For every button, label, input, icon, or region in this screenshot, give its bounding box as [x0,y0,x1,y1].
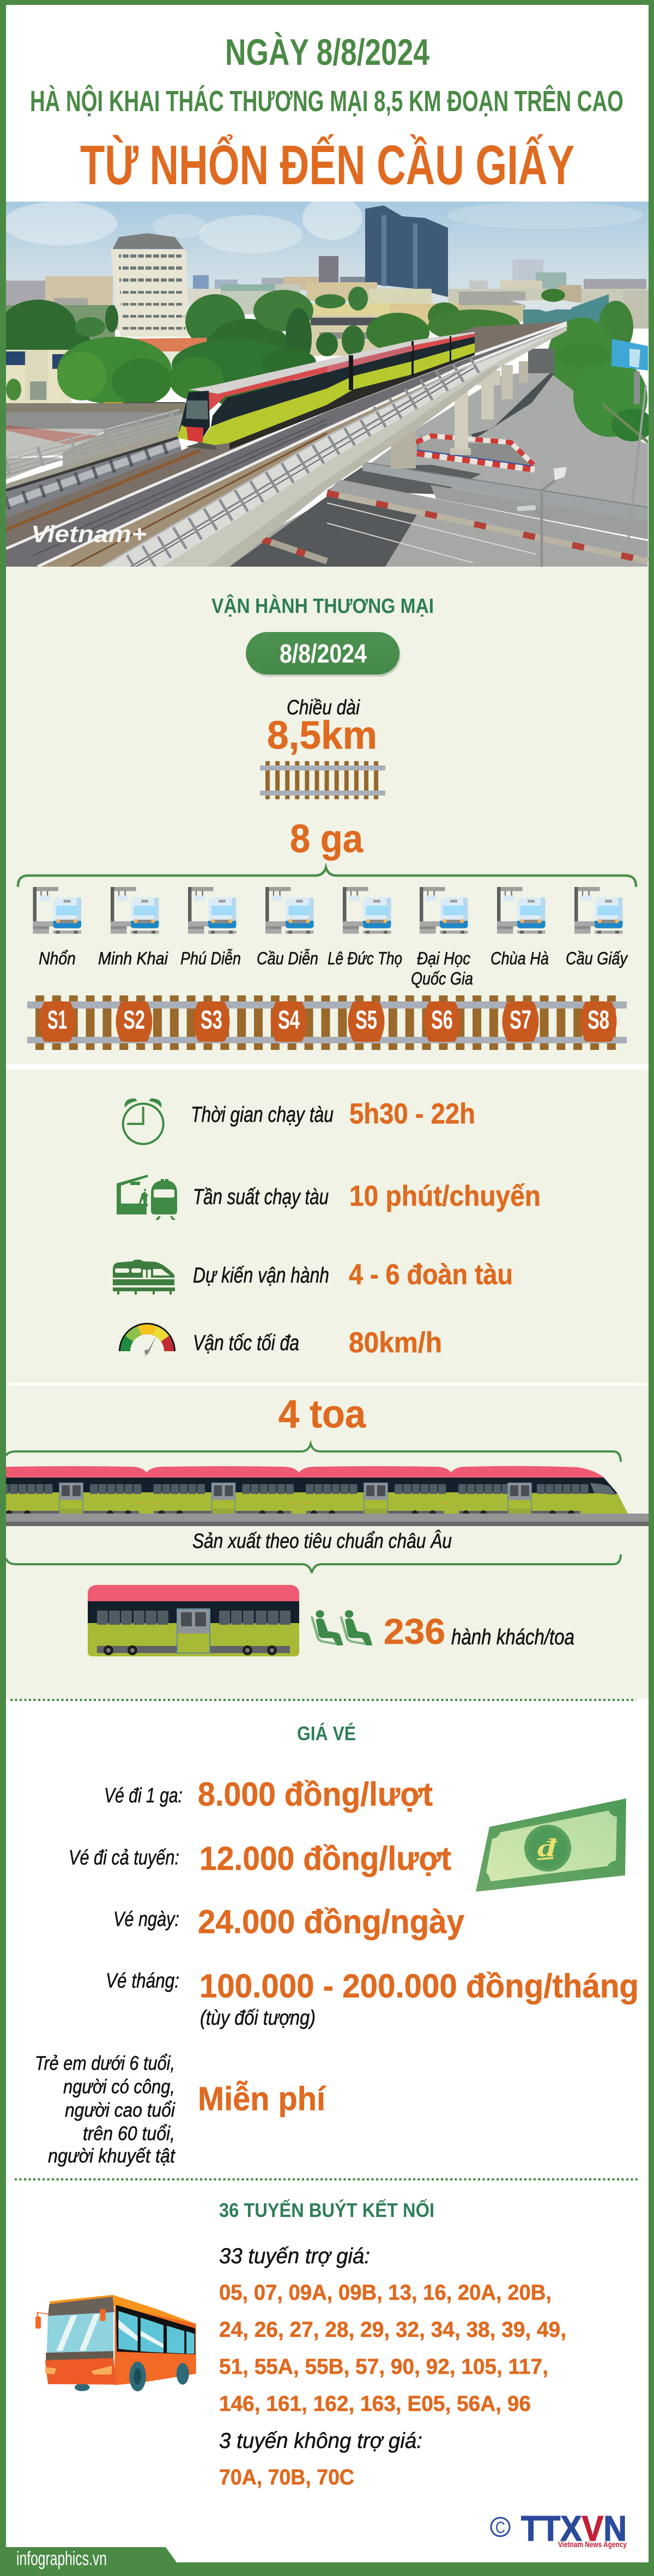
panel: commercial operation background [6,567,649,1064]
badge S5 [348,1001,385,1042]
trees [0,287,633,411]
date pill: 8/8/2024 [280,640,367,669]
brace over stations [18,867,636,886]
badge S8: S8 [588,1006,609,1035]
station name: Lê Đức Thọ: Lê Đức Thọ [328,949,402,968]
section heading: GIÁ VÉ [297,1722,356,1745]
icon: banknote: đ [537,1833,558,1862]
planned trains label: Dự kiến vận hành [193,1263,329,1287]
subsidized routes list: 146, 161, 162, 163, E05, 56A, 96 [219,2392,531,2416]
free ticket eligibility: trên 60 tuổi, [83,2122,175,2144]
free ticket eligibility: người cao tuổi [65,2099,175,2121]
monthly ticket value: 100.000 - 200.000 đồng/tháng [199,1967,639,2004]
icon: station Chùa Hà [497,887,545,934]
train illustration [0,1466,649,1526]
station name: Đại Học Quốc Gia: Quốc Gia [411,969,473,988]
European standard note: Sản xuất theo tiêu chuẩn châu Âu [192,1529,452,1553]
max speed label: Vận tốc tối đa [193,1331,299,1355]
icon: station Đại Học Quốc Gia [420,887,468,934]
monthly ticket label: Vé tháng: [106,1970,179,1992]
frequency label: Tần suất chạy tàu [193,1185,329,1209]
metro train [177,332,475,450]
logo: TTXVN copyright: TTXVN [521,2508,627,2548]
divider: dotted [10,1699,636,1701]
icon: station Cầu Giấy [574,887,622,934]
subsidized routes list: 24, 26, 27, 28, 29, 32, 34, 38, 39, 49, [219,2318,566,2342]
title line: date: NGÀY 8/8/2024 [225,32,429,73]
operating hours value: 5h30 - 22h [349,1098,475,1130]
left streets [6,403,186,412]
passengers per car value: 236 [384,1611,445,1651]
station name: Đại Học Quốc Gia [411,949,473,988]
piers [391,361,528,469]
badge S6: S6 [431,1006,453,1035]
footer: site name: infographics.vn [16,2547,107,2569]
length value: 8,5km [267,714,377,757]
outer railing band [102,327,567,567]
stations count: 8 ga [290,817,364,861]
subsidized routes label: 33 tuyến trợ giá: [219,2244,370,2268]
icon: orange bus [35,2295,196,2391]
cars count: 4 toa [278,1393,366,1436]
subsidized routes list [219,2281,566,2416]
icon: high speed train [113,1260,175,1295]
brace under train [6,1554,621,1573]
free ticket value: Miễn phí [198,2080,326,2117]
badge S2 [116,1001,153,1042]
passengers per car unit: hành khách/toa [451,1625,574,1649]
icon: speedometer [120,1324,174,1357]
icon: station Cầu Diễn [265,887,314,934]
day ticket label: Vé ngày: [113,1908,179,1931]
length label: Chiều dài [287,696,360,719]
orange roof house [133,338,207,351]
panel: commercial operation [18,594,636,1050]
subsidized routes list: 05, 07, 09A, 09B, 13, 16, 20A, 20B, [219,2281,552,2305]
track side walkway [6,410,179,456]
brace over train [6,1444,621,1462]
free ticket eligibility: Trẻ em dưới 6 tuổi, [35,2052,175,2074]
badge S4 [270,1001,307,1042]
badge S3: S3 [201,1006,222,1035]
station name: Minh Khai: Minh Khai [98,949,168,968]
badge S7: S7 [510,1006,531,1035]
badge S3 [193,1001,230,1042]
central green mass [57,337,316,403]
icon: station Lê Đức Thọ [343,887,391,934]
lamps [517,385,646,567]
badge S1: S1 [47,1006,67,1035]
unsubsidized routes label: 3 tuyến không trợ giá: [219,2429,422,2453]
logo: TTXVN copyright: C [495,2519,505,2537]
icon: short rail track [260,761,385,799]
far skyline [6,281,45,308]
max speed value: 80km/h [349,1327,442,1359]
panel: train composition [0,1393,649,1656]
section heading: 36 TUYẾN BUÝT KẾT NỐI [219,2198,434,2221]
panel: title header [30,32,623,196]
badge S7 [502,1001,538,1042]
subsidized routes list: 51, 55A, 55B, 57, 90, 92, 105, 117, [219,2355,548,2379]
icon: platform and train [117,1175,177,1220]
station name: Nhổn: Nhổn [39,949,76,968]
panel: ticket prices [35,1722,639,2167]
panel: operation facts [113,1098,541,1359]
station name: Chùa Hà: Chùa Hà [491,949,549,968]
icon: long rail track with station badges [27,995,627,1050]
photo: metro train on elevated viaduct [0,196,653,567]
track beds [6,321,567,549]
panel: train background [6,1386,649,1699]
icon: passenger seats [312,1610,372,1645]
watermark: Vietnam+: Vietnam+ [31,521,147,548]
station name: Cầu Giấy: Cầu Giấy [566,949,628,968]
badge S8 [580,1001,617,1042]
icon: station Phú Diễn [188,887,237,934]
full-line ticket value: 12.000 đồng/lượt [199,1840,451,1877]
single-station ticket label: Vé đi 1 ga: [104,1784,183,1807]
icon: alarm clock [123,1098,164,1144]
panel: operation facts background [6,1070,649,1383]
concrete girder [162,327,567,567]
unsubsidized routes list: 70A, 70B, 70C [219,2465,354,2489]
logo: TTXVN copyright: Vietnam News Agency [558,2540,627,2549]
badge S2: S2 [123,1006,145,1035]
section heading: VẬN HÀNH THƯƠNG MẠI [211,594,434,618]
operating hours label: Thời gian chạy tàu [191,1103,334,1127]
single-station ticket value: 8.000 đồng/lượt [198,1776,433,1813]
icon: station Nhổn [33,887,81,934]
badge S5: S5 [355,1006,377,1035]
free ticket eligibility: người có công, [63,2075,175,2098]
white building [111,233,189,337]
free ticket eligibility: người khuyết tật [48,2144,176,2167]
single car illustration [88,1585,299,1656]
villa [6,350,71,404]
full-line ticket label: Vé đi cả tuyến: [69,1846,179,1869]
badge S4: S4 [278,1006,300,1035]
right trees and billboard [528,339,653,444]
station name: Phú Diễn: Phú Diễn [180,949,241,968]
panel: connecting bus routes [35,2198,566,2489]
right road network [371,373,648,509]
date pill [246,632,401,677]
badge S1 [39,1001,75,1042]
free ticket eligibility [35,2052,176,2167]
monthly ticket note: (tùy đối tượng) [200,2007,316,2030]
icon: station Minh Khai [111,887,159,934]
divider: dotted [15,2178,639,2180]
planned trains value: 4 - 6 đoàn tàu [349,1259,513,1291]
badge S6 [424,1001,460,1042]
station name: Đại Học Quốc Gia: Đại Học [417,949,470,968]
frequency value: 10 phút/chuyến [349,1180,541,1212]
icon: banknote [476,1799,626,1892]
lead car [451,1466,628,1517]
day ticket value: 24.000 đồng/ngày [198,1903,464,1940]
station [523,309,571,324]
station name: Cầu Diễn: Cầu Diễn [257,949,318,968]
